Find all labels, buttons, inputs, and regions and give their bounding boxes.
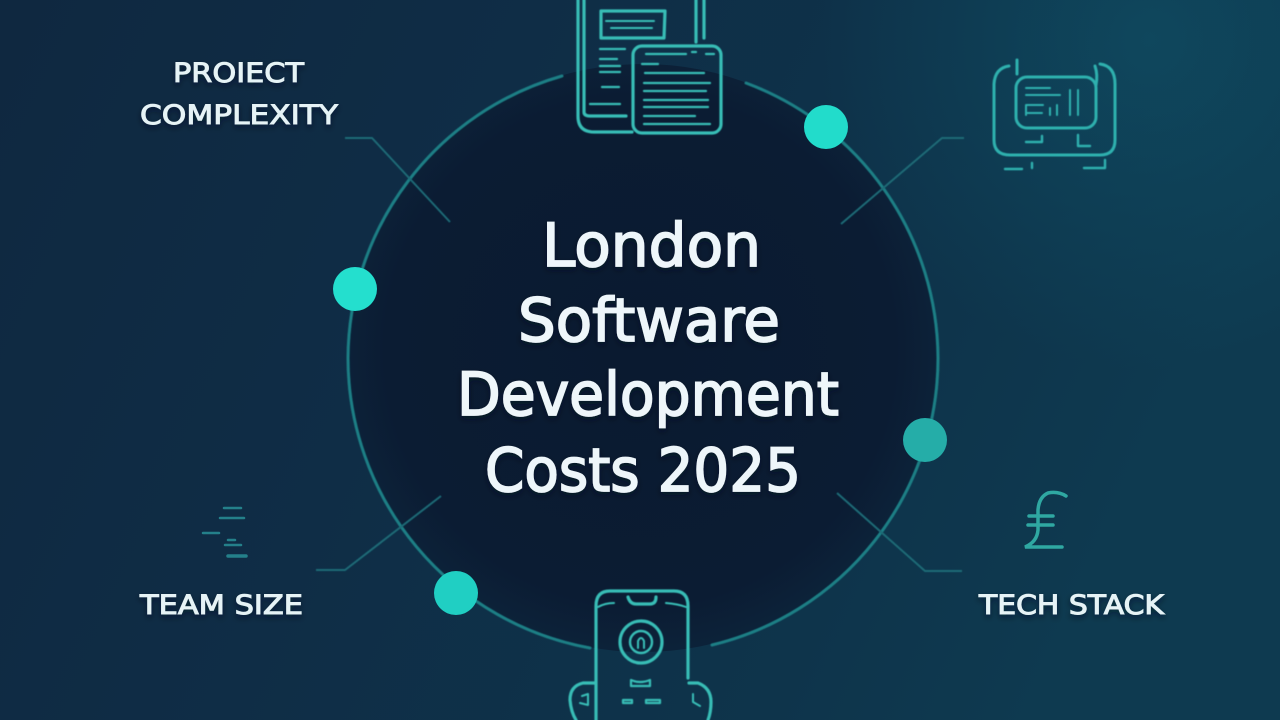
central dark disc [349,64,937,652]
title [457,211,839,506]
connector lines [316,138,964,571]
icon: team size [203,508,246,556]
icon: pound sign [1025,492,1066,547]
label: team size: TEAM SIZE [139,590,303,621]
title: Costs 2025 [485,436,801,506]
label: tech stack: TECH STACK [978,590,1165,621]
ring arcs [348,76,938,648]
label: project complexity: COMPLEXITY [140,100,339,131]
title: London [542,211,761,281]
icon: documents [578,0,721,133]
label: project complexity: PROIECT [173,58,305,89]
title: Development [457,360,839,430]
node dots [333,105,947,615]
label: project complexity [140,58,339,131]
title: Software [518,286,780,356]
icon: phone [570,591,711,720]
icon: hardware console [994,60,1115,169]
